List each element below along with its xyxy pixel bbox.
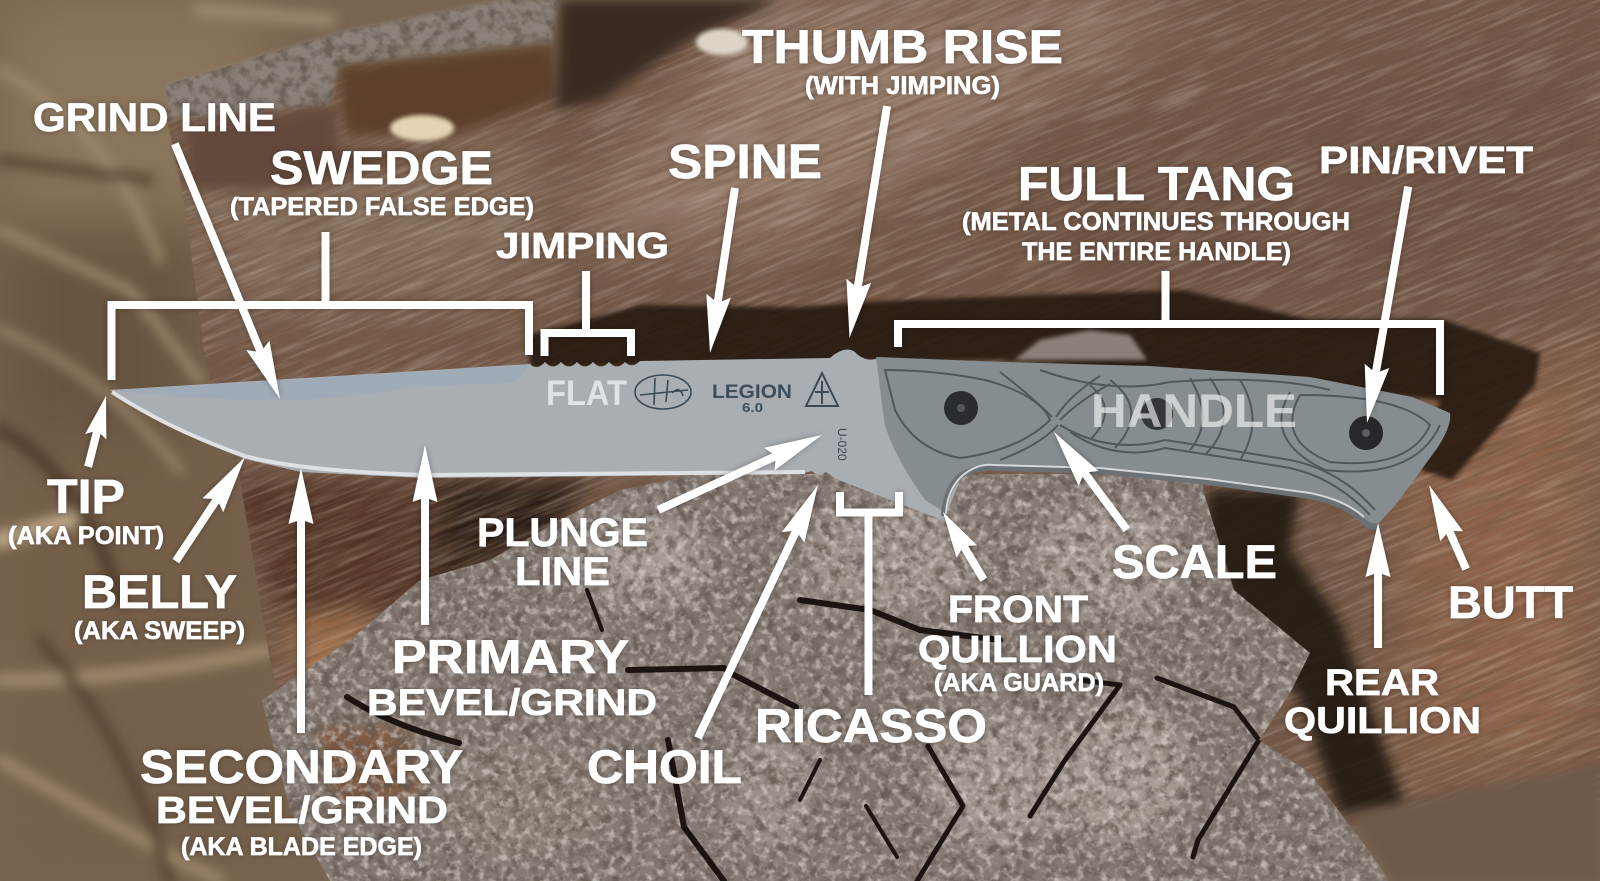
label: primary bevel — [367, 445, 657, 723]
swedge heading: SWEDGE — [270, 141, 493, 194]
arrow: plunge line — [653, 424, 827, 521]
belly note: (AKA SWEEP) — [74, 617, 245, 645]
label: pin/rivet — [1319, 140, 1533, 425]
swedge bevel — [112, 365, 528, 400]
arrow: scale — [1044, 425, 1137, 537]
blade etching: FLAT: FLAT — [546, 374, 627, 413]
label: thumb rise — [742, 20, 1063, 340]
butt text: BUTT — [1448, 577, 1573, 628]
arrow: choil — [687, 480, 829, 743]
arrow: thumb rise — [837, 104, 899, 340]
blade — [110, 350, 960, 520]
ricasso text: RICASSO — [755, 699, 987, 752]
secondary note: (AKA BLADE EDGE) — [181, 833, 422, 861]
handle scale — [876, 357, 1450, 523]
arrow: belly — [165, 450, 255, 568]
handle label: HANDLE — [1091, 384, 1297, 437]
arrow: tip — [77, 393, 117, 469]
label: full tang — [898, 157, 1440, 395]
arrow: butt — [1418, 480, 1478, 574]
background: cracked rock — [260, 460, 1400, 881]
swedge note: (TAPERED FALSE EDGE) — [230, 193, 534, 221]
arrow: grind line — [163, 139, 292, 404]
blade etching: triangle logo — [806, 373, 838, 406]
full tang heading: FULL TANG — [1018, 157, 1295, 210]
knife — [110, 350, 1450, 527]
plunge text line 2: LINE — [515, 550, 610, 594]
rivet: rear — [1349, 416, 1383, 450]
rear quillion line 2: QUILLION — [1284, 700, 1481, 741]
tip note: (AKA POINT) — [8, 522, 164, 550]
rivet: middle — [1141, 398, 1173, 430]
full tang note line 1: (METAL CONTINUES THROUGH — [962, 208, 1350, 236]
pin/rivet text: PIN/RIVET — [1319, 140, 1533, 182]
arrow: front quillion — [933, 506, 994, 586]
blade etching: LEGION 6.0: LEGION — [712, 382, 792, 403]
front quillion note: (AKA GUARD) — [934, 669, 1104, 697]
front quillion line 1: FRONT — [948, 589, 1088, 631]
background: blurred wood at bottom right — [1350, 765, 1600, 881]
metal liner along the handle — [944, 465, 1381, 527]
label: spine — [668, 136, 822, 355]
label: tip — [8, 393, 164, 550]
blade etching: LEGION 6.0 — [712, 382, 792, 415]
label: butt — [1418, 480, 1573, 628]
cast shadow under the handle — [1205, 490, 1405, 815]
background: grey bark at the top of the stump — [160, 0, 780, 190]
label: secondary bevel — [140, 468, 463, 861]
blade etching: LEGION 6.0: 6.0 — [742, 400, 763, 415]
primary heading: PRIMARY — [392, 630, 629, 683]
cutting edge highlight — [112, 392, 805, 475]
secondary heading: SECONDARY — [140, 740, 463, 793]
rear quillion line 1: REAR — [1325, 662, 1439, 703]
plunge text line 1: PLUNGE — [477, 511, 648, 555]
full tang note line 2: THE ENTIRE HANDLE) — [1022, 238, 1291, 266]
label: rear quillion — [1284, 523, 1481, 741]
choil text: CHOIL — [587, 740, 742, 793]
thumb rise heading: THUMB RISE — [742, 20, 1063, 73]
arrow: primary bevel — [412, 445, 438, 625]
thumb rise note: (WITH JIMPING) — [805, 72, 1000, 100]
arrow: spine — [698, 186, 747, 355]
arrow: secondary bevel — [288, 468, 314, 733]
handle contour lines — [885, 370, 1440, 515]
tip heading: TIP — [47, 471, 125, 524]
label: front quillion — [918, 506, 1117, 697]
secondary subheading: BEVEL/GRIND — [156, 790, 448, 832]
belly heading: BELLY — [82, 565, 237, 618]
label: scale — [1044, 425, 1277, 588]
label: jimping — [496, 225, 669, 356]
spine text: SPINE — [668, 136, 822, 189]
label: swedge — [112, 141, 534, 380]
label: plunge line — [477, 424, 827, 594]
jimping text: JIMPING — [496, 225, 669, 266]
bracket: full tang — [898, 271, 1440, 395]
rivet: front — [944, 391, 978, 425]
blade etching: serial number: U-020 — [835, 428, 849, 461]
primary subheading: BEVEL/GRIND — [367, 682, 657, 723]
bracket: swedge — [112, 232, 529, 380]
background: rock chunk behind the handle — [1014, 330, 1147, 360]
scale text: SCALE — [1112, 535, 1277, 588]
label: choil — [587, 480, 829, 793]
grind line text: GRIND LINE — [33, 96, 276, 140]
arrow: pin/rivet — [1355, 184, 1421, 425]
label: ricasso — [755, 492, 987, 752]
bracket: ricasso — [840, 492, 899, 695]
cast shadow of the knife on wood — [530, 290, 1540, 480]
bracket: jimping — [544, 271, 631, 356]
front quillion line 2: QUILLION — [918, 629, 1117, 671]
label: grind line — [33, 96, 292, 404]
label: belly — [74, 450, 255, 645]
arrow: rear quillion — [1366, 523, 1390, 648]
blade etching: signature logo — [635, 375, 691, 409]
